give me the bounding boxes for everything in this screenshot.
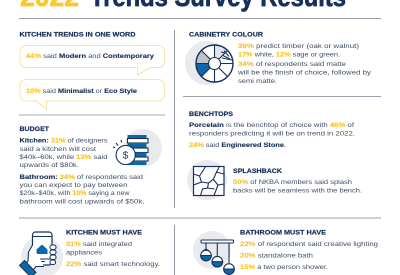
icon: hand holding smartphone xyxy=(20,232,63,275)
callout: minimalist or eco style: 10% said Minimalist or Eco Style xyxy=(26,88,137,95)
text: benchtop stats xyxy=(189,122,355,149)
text: cabinetry stats xyxy=(237,43,372,85)
text: bathroom budget: $20k–$40k, with 10% saying a new xyxy=(20,190,130,197)
text: bathroom budget: bathroom will cost upwards of $50k. xyxy=(20,198,145,206)
heading: cabinetry colour: CABINETRY COLOUR xyxy=(189,32,263,38)
text: bathroom budget xyxy=(20,174,145,206)
text: kitchen budget: upwards of $80k. xyxy=(20,162,79,169)
callout: modern and contemporary: 44% said Modern and Contemporary xyxy=(26,53,155,60)
text: bathroom must have stats: 20% standalone bath xyxy=(240,252,314,260)
text: kitchen budget: said a kitchen will cost xyxy=(20,146,96,153)
text: kitchen budget xyxy=(20,138,108,169)
icon: cracked tile xyxy=(187,160,227,200)
icon: coin stack: $ xyxy=(123,151,129,162)
heading: bathroom must have: BATHROOM MUST HAVE xyxy=(240,230,327,236)
text: kitchen must have stats: appliances xyxy=(66,250,102,256)
text: cabinetry stats: will be the finish of choice, followed by xyxy=(237,70,372,76)
text: kitchen budget: $40k–60k, while 13% said xyxy=(20,154,108,161)
text: bathroom budget: you can expect to pay between xyxy=(20,182,128,189)
text: benchtop stats: responders predicting it will be on trend in 2022. xyxy=(189,130,355,138)
callout: modern and contemporary xyxy=(20,46,164,75)
text: splashback stat xyxy=(233,179,362,194)
text: cabinetry stats: 17% white, 12% sage or green. xyxy=(238,52,340,58)
panel: splashback xyxy=(187,160,362,200)
heading: splashback: SPLASHBACK xyxy=(233,168,282,175)
panel: budget xyxy=(20,126,162,206)
panel: benchtops xyxy=(189,111,355,149)
icon: colour wheel xyxy=(185,41,233,85)
text: kitchen must have stats: 31% said integrated xyxy=(66,241,133,248)
text: benchtop stats: Porcelain is the benchtop of choice with 46% of xyxy=(189,122,354,129)
text: cabinetry stats: 39% predict timber (oak or walnut) xyxy=(238,43,359,50)
text: cabinetry stats: semi matte. xyxy=(238,78,277,85)
heading: budget: BUDGET xyxy=(20,126,49,133)
text: splashback stat: 50% of NKBA members said splash xyxy=(233,179,353,186)
text: bathroom budget: Bathroom: 34% of respondents said xyxy=(20,174,144,181)
panel: bathroom must have xyxy=(193,230,379,274)
text: bathroom must have stats: 22% of respondent said creative lighting xyxy=(240,241,379,248)
text: kitchen must have stats: 22% said smart technology. xyxy=(66,261,160,268)
heading: kitchen trends: KITCHEN TRENDS IN ONE WORD xyxy=(20,32,136,38)
text: kitchen must have stats xyxy=(66,241,160,268)
panel: cabinetry colour xyxy=(185,32,372,85)
icon: coin stack xyxy=(113,129,162,167)
text: cabinetry stats: 34% of respondents said matte xyxy=(238,61,347,68)
text: bathroom must have stats xyxy=(240,241,379,271)
heading: kitchen must have: KITCHEN MUST HAVE xyxy=(66,230,143,236)
panel: kitchen trends in one word xyxy=(20,32,164,109)
callout: minimalist or eco style xyxy=(20,80,164,109)
icon: pendant lights xyxy=(193,231,234,274)
heading: benchtops: BENCHTOPS xyxy=(189,111,234,118)
text: bathroom must have stats: 15% a two person shower. xyxy=(240,264,328,271)
text: benchtop stats: 24% said Engineered Stone . xyxy=(189,142,286,149)
text: kitchen budget: Kitchen: 31% of designers xyxy=(20,138,108,144)
panel: kitchen must have xyxy=(20,230,160,275)
text: splashback stat: backs will be seamless with the bench. xyxy=(233,188,362,194)
